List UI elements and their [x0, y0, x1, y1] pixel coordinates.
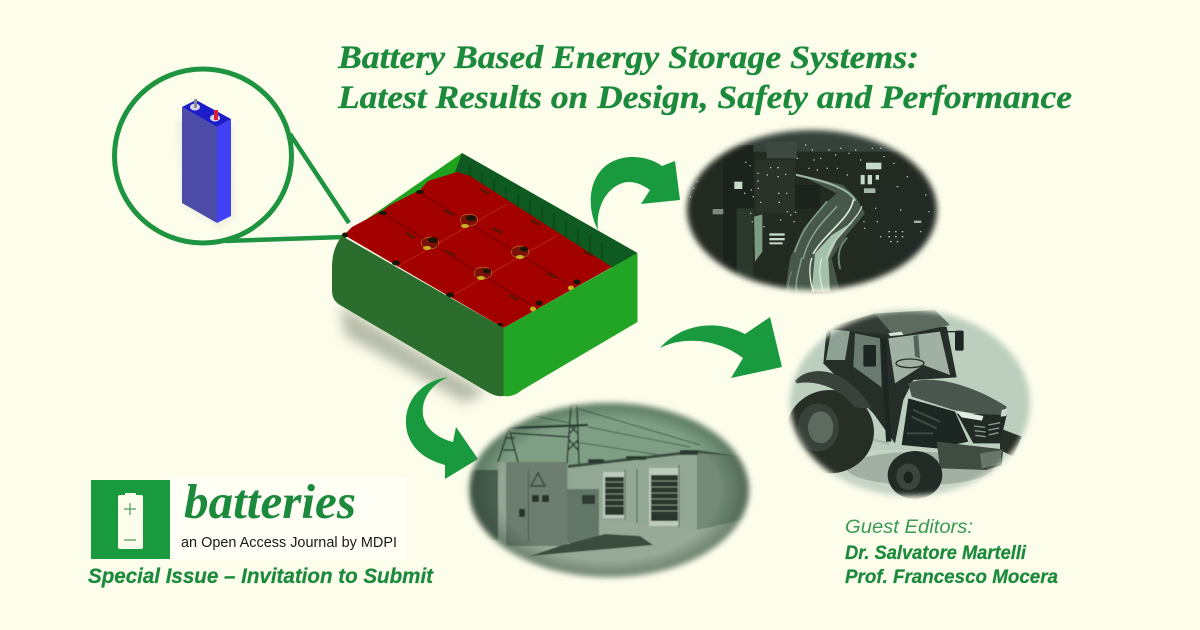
- title: Latest Results on Design, Safety and Performance: [337, 80, 1072, 116]
- pack front right wall: [504, 253, 638, 396]
- journal tagline: an Open Access Journal by MDPI: [181, 535, 397, 551]
- title: Battery Based Energy Storage Systems:: [337, 40, 919, 76]
- icon: blue battery cell: [176, 99, 236, 228]
- arrow: pack to tractor: [660, 317, 782, 378]
- tractor rear wheel: [786, 390, 874, 473]
- skyline: [724, 145, 797, 278]
- photo: tractor: [787, 307, 1033, 499]
- pack front left wall: [332, 236, 504, 396]
- battery pack: [332, 153, 638, 403]
- guest editors: Prof. Francesco Mocera: [845, 567, 1058, 588]
- pack inner walls: [341, 153, 638, 268]
- power pylons and wires: [498, 405, 700, 464]
- tractor hood and grille: [908, 380, 1007, 443]
- guest editors: Guest Editors:: [845, 516, 973, 538]
- tractor front wheel: [888, 451, 942, 499]
- guest editors: [845, 516, 1058, 588]
- electrical cabinets: [470, 462, 599, 546]
- tractor rear fender: [795, 371, 872, 408]
- tractor cab: [823, 310, 964, 443]
- journal name: batteries: [184, 474, 356, 529]
- guest editors: Dr. Salvatore Martelli: [845, 543, 1027, 564]
- scattered city lights: [690, 145, 930, 242]
- red battery modules: [342, 172, 612, 328]
- journal logo panel: [91, 474, 407, 560]
- arrow: pack to substation: [406, 377, 478, 479]
- icon: batteries logo square: [91, 480, 170, 559]
- photo: city at night: [682, 126, 942, 295]
- arrow: pack to city: [591, 157, 680, 230]
- title: [337, 40, 1072, 116]
- highway: [785, 173, 865, 292]
- connector hubs: [342, 190, 580, 327]
- tractor engine and axle: [873, 398, 1022, 470]
- invitation line: Special Issue – Invitation to Submit: [88, 565, 434, 588]
- battery container: [568, 450, 750, 530]
- pack shadow: [340, 305, 486, 403]
- ground shadow: [530, 534, 653, 556]
- callout: zoom circle with connector lines: [114, 69, 349, 243]
- photo: substation and battery containers: [464, 398, 754, 582]
- lit windows: [713, 163, 921, 262]
